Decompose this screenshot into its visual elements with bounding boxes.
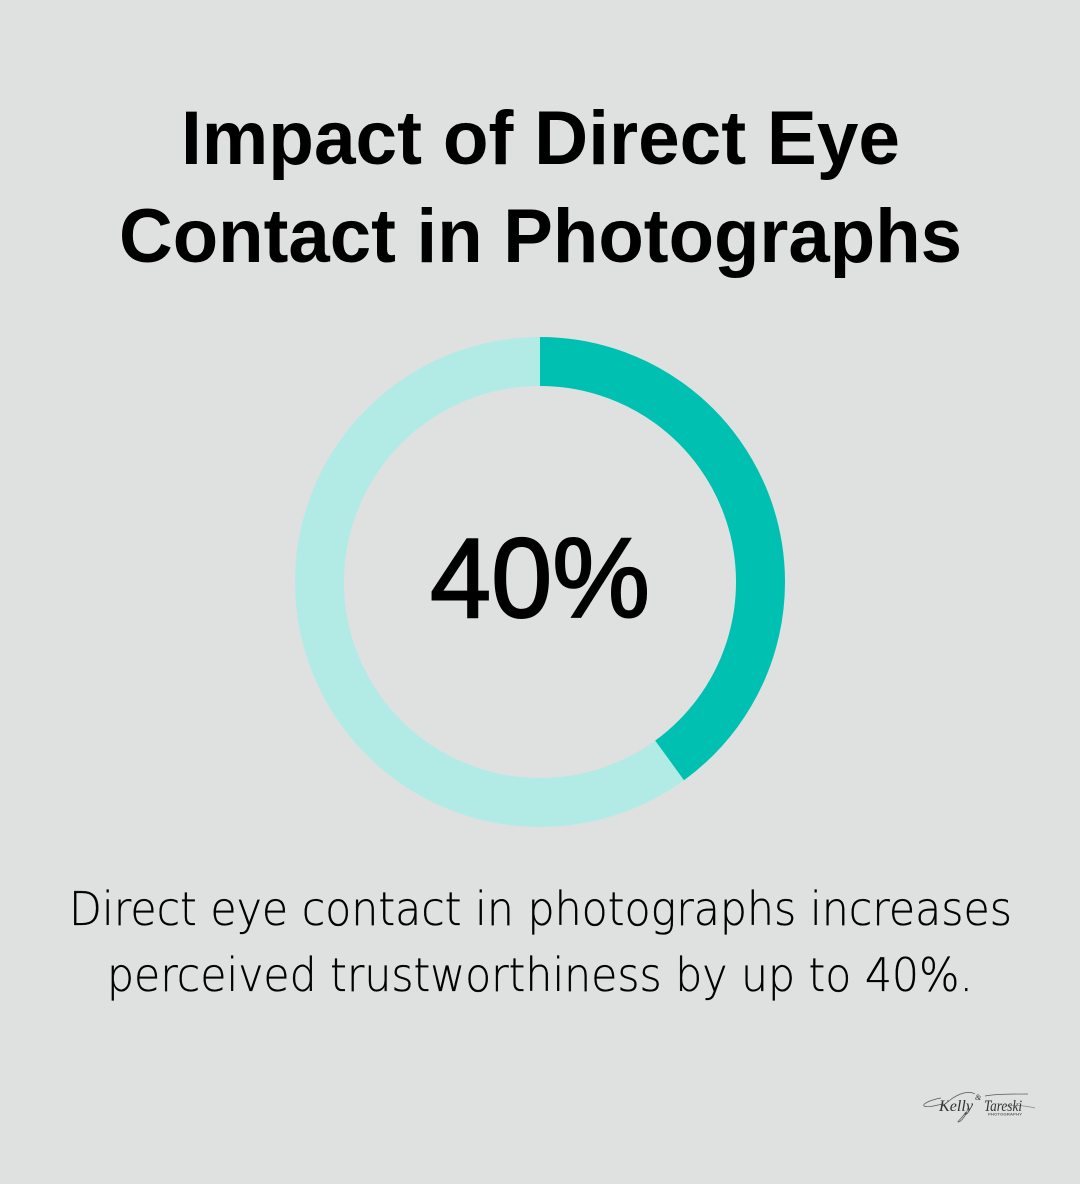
logo tagline: PHOTOGRAPHY bbox=[988, 1112, 1023, 1116]
logo name: Tareski bbox=[984, 1098, 1022, 1115]
logo: signature bbox=[924, 1092, 1035, 1122]
description bbox=[69, 882, 1012, 1002]
logo name: Kelly bbox=[938, 1098, 974, 1115]
title: Contact in Photographs bbox=[119, 194, 962, 279]
description: Direct eye contact in photographs increases bbox=[69, 882, 1012, 936]
title: Impact of Direct Eye bbox=[181, 96, 900, 181]
donut chart: 40% bbox=[320, 362, 761, 802]
logo swashes bbox=[924, 1092, 1035, 1122]
description: perceived trustworthiness by up to 40%. bbox=[107, 948, 973, 1002]
title bbox=[119, 96, 962, 279]
donut track bbox=[320, 362, 760, 802]
center value: 40% bbox=[430, 515, 650, 641]
donut value arc bbox=[540, 362, 761, 760]
logo name: & bbox=[975, 1093, 982, 1102]
